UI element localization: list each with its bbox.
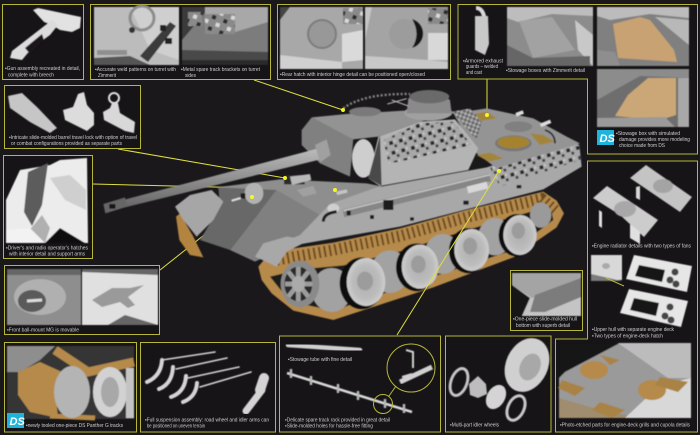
caption: exhaust: guards – welded [466,64,498,70]
rear deck [453,108,580,168]
parts drawing [8,92,135,133]
caption: ▪One-piece slide-molded hull [513,316,577,322]
rear idler wheel [530,202,551,228]
drawing: wheel exploded [447,331,558,423]
panel: driver hatches [4,156,92,258]
caption: rack [285,418,390,430]
panel: barrel travel lock [4,86,140,148]
caption: or combat configurations provided as separate parts [11,141,122,147]
turret spare tracks [383,122,472,163]
leader lines [93,79,487,270]
photo: MG exterior [7,269,81,325]
panel: one-piece tracks [4,342,136,432]
drawing: deck variant 1 [626,255,692,292]
caption [9,135,137,147]
photo: hatch open [365,7,448,69]
panel: exhaust guards and stowage [458,4,698,154]
caption: tube: ▪Stowage tube with fine detail [288,357,352,363]
caption: resin box [616,131,690,149]
panel: hull bottom [510,270,582,330]
turret roof rail [343,94,410,108]
machine gun [232,197,243,201]
drawing: suspension arms [147,352,264,411]
caption: resin box: damage provides more modeling [619,137,690,143]
caption: ▪Rear hatch with interior hinge detail can be positioned open/closed [280,72,425,78]
hull side spare tracks [490,141,581,187]
panel: suspension [140,342,276,432]
deck grille [495,135,532,151]
photo: tracks [7,346,134,419]
turret front [302,117,353,177]
caption: weld: ▪Accurate weld patterns on turret with [95,67,176,73]
caption [145,418,269,430]
hull side [277,140,582,248]
detail callout circle [374,344,435,414]
track inner gap [270,210,553,311]
caption: ▪Full suspension assembly: road wheel and idler arms can [145,418,269,424]
panel: stowage tube and track rack [280,336,440,432]
panel: engine deck [556,161,698,432]
drawing: hull bottom [512,273,581,316]
caption: weld: Zimmerit [98,73,116,79]
inset photo [591,255,622,281]
bright stowage [467,182,488,193]
front fender right [255,237,310,267]
arrow [606,278,624,286]
turret cheek highlight [352,139,375,178]
caption: ▪Front ball-mount MG is movable [7,328,79,334]
caption: complete with breech [8,72,54,78]
panel: weld patterns and brackets [90,4,270,80]
photo: metal brackets [182,7,268,65]
caption: resin box: choice made from DS [619,143,665,149]
turret roof [312,111,453,139]
drawing: radiators [593,165,692,244]
panel: rear hatch [278,4,450,80]
hull side tube [343,177,490,213]
front left track [176,213,203,257]
drawing: track rack [287,369,412,413]
caption: weld [95,67,176,79]
icon: DS logo [597,130,615,145]
main track [258,192,564,320]
caption: ▪Multi-part idler wheels [450,422,499,428]
caption: exhaust [463,58,504,76]
caption: upper hull: ▪Two types of engine-deck hatch [592,334,663,340]
caption: brackets: sides [185,73,196,79]
gun barrel [123,148,321,207]
drawing: hatches [6,158,88,243]
panel: idler wheels [446,331,558,432]
turret side [368,119,478,186]
leader dots [250,108,501,199]
caption [513,316,577,329]
photo: hatch closed [280,7,363,69]
icon: DS logo: DS [10,416,25,428]
caption: be positioned on uneven terrain [147,424,205,430]
caption: resin box: ▪Stowage box with simulated [616,131,680,137]
caption: ▪Gun assembly recreated in detail, [5,66,80,72]
central tank illustration [103,90,582,320]
caption: bottom with superb detail [516,323,570,329]
icon: DS logo: DS [600,133,615,145]
drive sprocket [281,261,319,307]
caption: exhaust: ▪Armored exhaust [463,58,504,64]
leader line to rack panel [397,171,499,335]
caption: ▪newly tooled one-piece DS Panther G tracks [26,423,123,429]
photo: MG interior [82,269,158,325]
gun drawing [10,8,81,60]
photo: weld patterns [94,6,179,65]
deck mesh panels [470,112,497,122]
caption: upper hull: ▪Upper hull with separate engine deck [592,327,674,333]
panel: ball-mount MG [4,266,160,334]
caption: with interior detail and support arms [9,252,85,258]
drawing: rack close-up [400,350,432,382]
caption: brackets [181,67,261,79]
muzzle brake [103,197,127,213]
track ribs [277,199,557,260]
hull bow hatches [284,174,348,197]
drawing: stowage tube [288,345,360,350]
front road wheels [340,214,537,309]
front bracket [327,204,339,213]
caption: ▪Driver's and radio operator's hatches [6,246,88,252]
hull front deck [217,179,400,220]
photo: etched parts [558,343,691,418]
ball mount [245,183,263,204]
icon: exhaust guard [475,8,489,55]
caption: exhaust: and cast [466,70,482,76]
caption: ▪Intricate slide-molded barrel travel lock with option of travel [9,135,137,141]
photo: stowage boxes [507,7,593,66]
panel: gun assembly [2,4,84,80]
caption: upper hull [592,327,674,340]
deck hatch [504,121,532,132]
photo: resin box top [597,7,689,66]
exhaust guards [516,112,551,125]
caption: brackets: ▪Metal spare track brackets on turret [181,67,261,73]
caption: radiators: ▪Engine radiator details with two types of fans [592,244,691,250]
turret rear detail [452,108,482,140]
gun collar [315,139,331,162]
cupola [404,105,452,121]
caption: rack: ▪Delicate spare track rack provided in great detail [285,418,390,424]
glacis plate right [230,190,320,262]
tool details [347,185,521,221]
caption [5,66,80,78]
photo: resin box damaged [597,69,689,127]
caption: rack: ▪Slide-molded holes for hassle-free fitting [285,424,373,430]
glacis plate left [200,187,277,250]
caption: stowage boxes: ▪Stowage boxes with Zimmerit detail [506,68,585,74]
drawing: deck variant 2 [620,289,688,327]
rear road wheels [312,218,512,312]
caption: etched parts: ▪Photo-etched parts for engine-deck grills and cupola details [560,422,690,428]
caption [6,246,88,258]
front fender left [175,190,223,237]
